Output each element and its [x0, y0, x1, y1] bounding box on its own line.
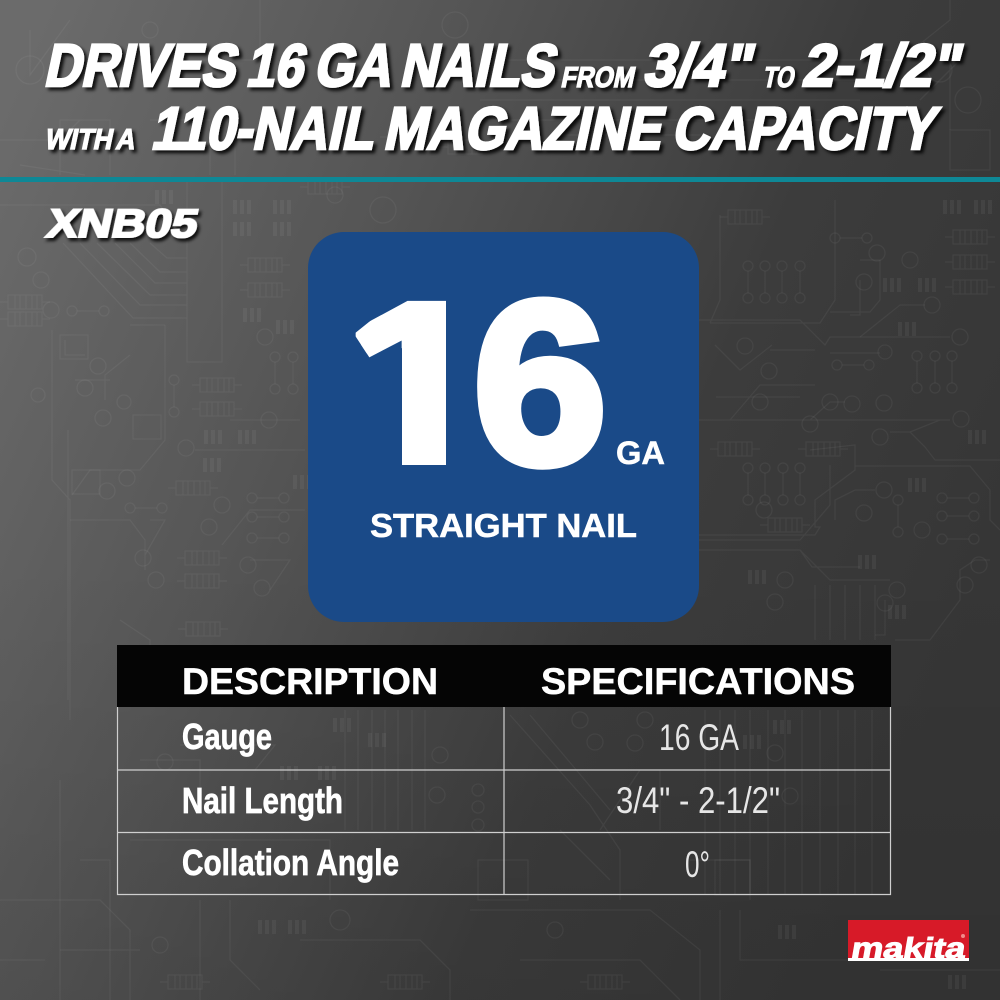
- title line 1: DRIVES 16 GA NAILS: DRIVES 16 GA NAILS: [40, 32, 565, 99]
- model number: XNB05: [43, 200, 203, 246]
- row label: nail length: Nail Length: [182, 780, 343, 821]
- badge unit GA: GA: [616, 435, 665, 471]
- logo: makita: makita: [849, 933, 969, 965]
- title: 2-1/2 inch: 2-1/2": [798, 32, 970, 99]
- row value: collation angle: 0°: [685, 844, 710, 885]
- row label: gauge: Gauge: [182, 716, 272, 757]
- row label: collation angle: Collation Angle: [182, 842, 399, 883]
- row value: gauge: 16 GA: [659, 717, 739, 758]
- panel: gauge badge: [308, 232, 699, 622]
- specifications table: [117, 645, 891, 895]
- title line 2: with a: WITH A: [43, 123, 139, 156]
- row value: nail length: 3/4" - 2-1/2": [616, 780, 780, 821]
- title: 3/4 inch: 3/4": [639, 32, 762, 99]
- table header band: [117, 645, 891, 707]
- badge number 6: 6: [473, 254, 607, 513]
- logo: makita: [848, 920, 969, 965]
- teal divider: [0, 177, 1000, 182]
- header: specifications: SPECIFICATIONS: [541, 661, 855, 702]
- badge label: STRAIGHT NAIL: [370, 507, 637, 544]
- table grid: [117, 707, 891, 895]
- title: from: FROM: [559, 61, 638, 94]
- title: [40, 32, 970, 162]
- header: description: DESCRIPTION: [182, 661, 438, 702]
- badge number 1: 1: [342, 256, 497, 515]
- title: to: TO: [761, 61, 798, 94]
